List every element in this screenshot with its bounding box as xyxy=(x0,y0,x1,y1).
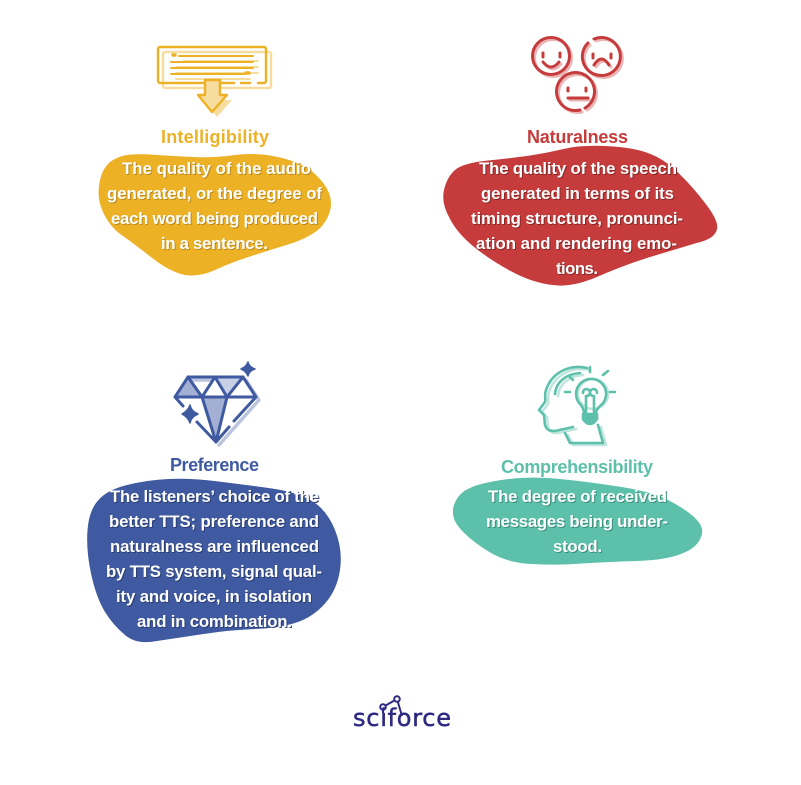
heading: Comprehensibility: Comprehensibility xyxy=(501,457,653,477)
panel: comprehensibility xyxy=(453,367,702,565)
blob: naturalness background xyxy=(443,146,717,286)
heading: Intelligibility: Intelligibility xyxy=(161,127,269,147)
text block: naturalness description xyxy=(471,159,683,278)
text block: intelligibility description xyxy=(107,159,322,253)
text block: intelligibility description: each word being produced xyxy=(111,209,318,228)
blob: intelligibility background xyxy=(99,154,331,275)
icon: head with light bulb xyxy=(539,367,615,445)
icon: diamond with sparkles xyxy=(175,362,259,445)
blob: comprehensibility background xyxy=(453,478,702,565)
text block: preference description: The listeners’ choice of the xyxy=(110,487,319,506)
logo: sciforce xyxy=(353,696,451,732)
text block: intelligibility description: The quality of the audio xyxy=(122,159,311,178)
icon: three emotion faces xyxy=(532,38,622,113)
heading: Naturalness: Naturalness xyxy=(527,127,628,147)
panel: intelligibility xyxy=(99,47,331,275)
text block: naturalness description: ation and rendering emo- xyxy=(476,234,677,253)
text block: naturalness description: timing structure, pronunci- xyxy=(471,209,683,228)
logo network mark xyxy=(380,696,402,716)
text block: preference description: naturalness are influenced xyxy=(110,537,319,556)
panel: preference xyxy=(87,362,341,642)
icon: text document with down arrow xyxy=(158,47,271,117)
logo wordmark: sciforce xyxy=(353,704,451,732)
text block: intelligibility description: generated, or the degree of xyxy=(107,184,322,203)
panel: naturalness xyxy=(443,38,717,286)
text block: preference description: ity and voice, in isolation xyxy=(116,587,312,606)
text block: comprehensibility description: messages being under- xyxy=(486,512,668,531)
text block: preference description: and in combination. xyxy=(137,612,292,631)
text block: naturalness description: tions. xyxy=(556,259,598,278)
text block: preference description xyxy=(106,487,322,631)
text block: intelligibility description: in a sentence. xyxy=(161,234,268,253)
text block: preference description: by TTS system, signal qual- xyxy=(106,562,322,581)
text block: preference description: better TTS; preference and xyxy=(109,512,319,531)
blob: preference background xyxy=(87,479,341,642)
text block: comprehensibility description: The degree of received xyxy=(488,487,667,506)
text block: naturalness description: The quality of the speech xyxy=(479,159,677,178)
text block: naturalness description: generated in terms of its xyxy=(481,184,674,203)
text block: comprehensibility description: stood. xyxy=(553,537,602,556)
heading: Preference: Preference xyxy=(170,455,259,475)
text block: comprehensibility description xyxy=(486,487,668,556)
